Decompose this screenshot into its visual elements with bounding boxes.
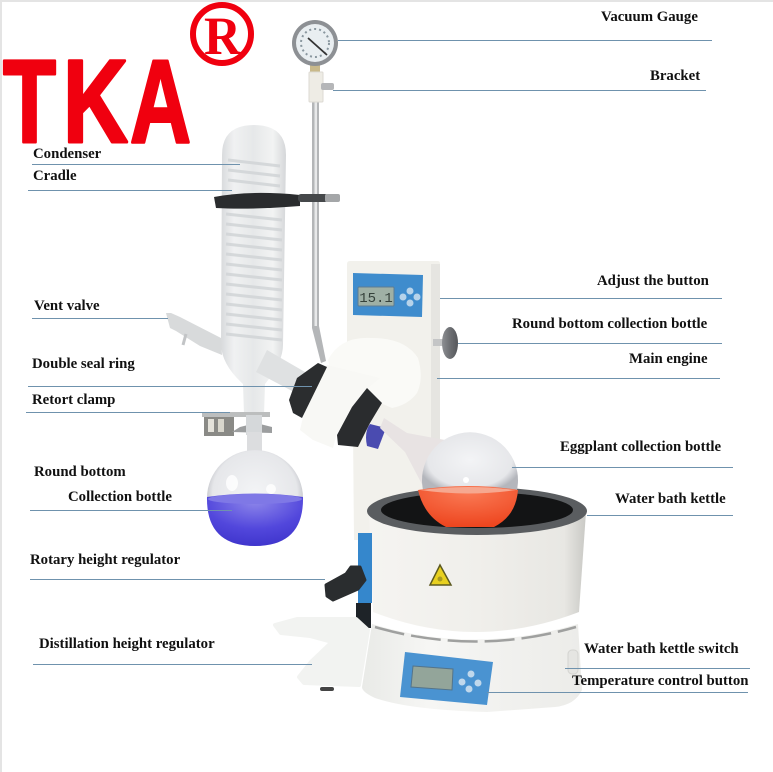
labels: Cradle (33, 168, 77, 184)
labels: Round bottom collection bottle (512, 316, 708, 332)
retort clamp (202, 412, 272, 436)
base control panel (400, 652, 493, 705)
labels: Distillation height regulator (39, 636, 215, 652)
water bath kettle (367, 487, 587, 632)
motor control panel (353, 273, 423, 317)
round bottom flask (207, 432, 303, 546)
labels: Water bath kettle (615, 491, 726, 507)
eggplant flask neck (380, 418, 445, 490)
side joint (256, 350, 305, 392)
cooling coil (226, 160, 282, 340)
TKA logo: K (63, 36, 128, 168)
rotary motor housing (289, 338, 421, 449)
distillation base plate (275, 619, 368, 691)
TKA logo: A (130, 36, 191, 168)
labels: Condenser (33, 146, 102, 162)
hazard triangle (430, 565, 451, 585)
condenser glass (166, 125, 305, 415)
labels: Adjust the button (597, 273, 709, 289)
vent valve arm (166, 313, 222, 355)
labels: Vent valve (34, 298, 100, 314)
motor control panel: 15.1 (359, 291, 393, 307)
labels: Main engine (629, 351, 708, 367)
leader lines (26, 40, 750, 692)
registered mark: R (204, 6, 242, 66)
kettle base (362, 624, 582, 712)
labels: Vacuum Gauge (601, 9, 698, 25)
labels: Temperature control button (572, 673, 748, 689)
TKA logo (3, 36, 191, 168)
kettle switch (568, 650, 578, 674)
TKA logo: T (3, 36, 56, 168)
registered mark (193, 5, 251, 66)
labels: Round bottom (34, 464, 126, 480)
cradle clamp (214, 193, 340, 209)
gauge dial (292, 20, 338, 66)
labels: Double seal ring (32, 356, 135, 372)
labels: Retort clamp (32, 392, 115, 408)
adjust knob (433, 327, 458, 359)
labels: Rotary height regulator (30, 552, 181, 568)
vacuum gauge and bracket rod (292, 20, 338, 363)
labels: Eggplant collection bottle (560, 439, 722, 455)
main engine column (347, 261, 458, 540)
labels: Collection bottle (68, 489, 172, 505)
eggplant flask (418, 432, 518, 527)
labels: Water bath kettle switch (584, 641, 739, 657)
rotary height regulator (326, 533, 372, 628)
labels: Bracket (650, 68, 700, 84)
